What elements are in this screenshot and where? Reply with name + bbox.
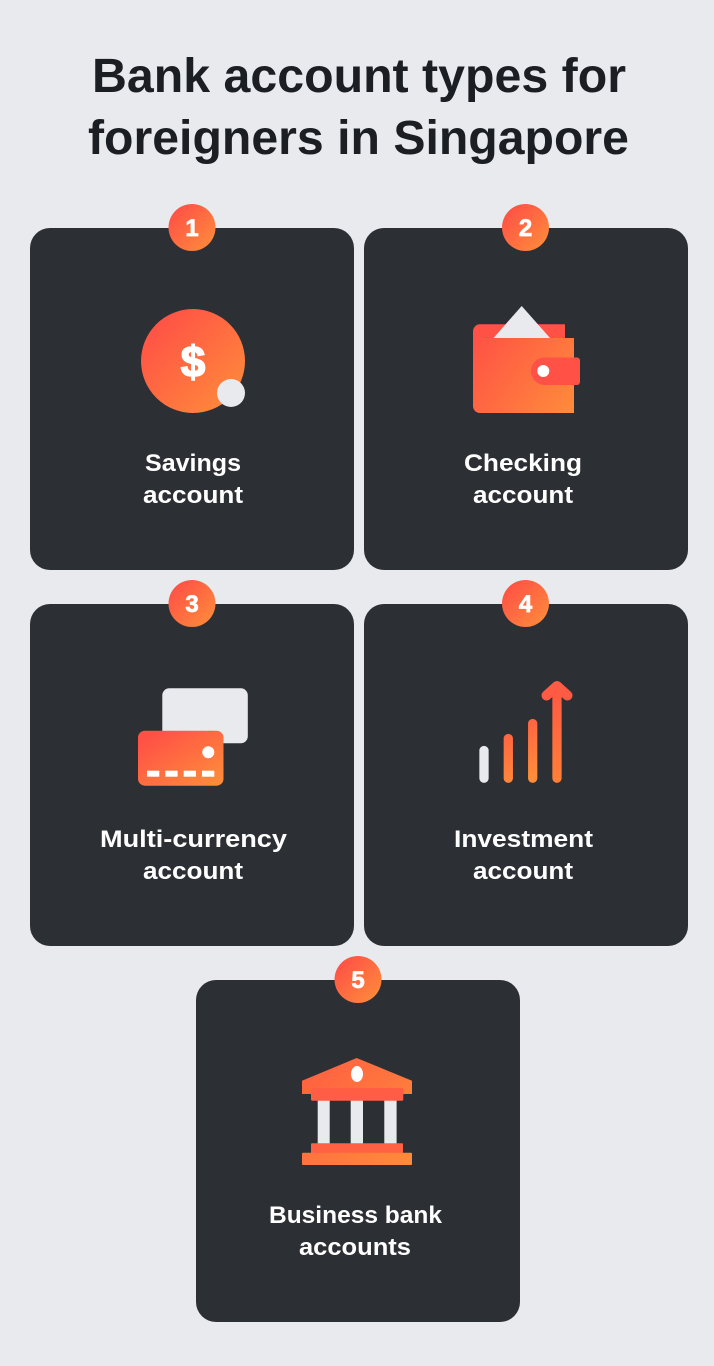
label: business bank accounts: Business bank bbox=[269, 1202, 443, 1229]
badge 5 bbox=[334, 956, 382, 1003]
label: multi-currency account bbox=[100, 826, 288, 885]
label: savings account: Savings bbox=[145, 450, 241, 477]
panel: savings account bbox=[30, 204, 354, 570]
label: savings account: account bbox=[143, 482, 243, 509]
badge 2 bbox=[502, 204, 549, 251]
label: savings account bbox=[143, 450, 243, 509]
badge 5: 5 bbox=[351, 967, 365, 994]
badge 2: 2 bbox=[519, 215, 532, 242]
label: investment account bbox=[454, 826, 593, 885]
label: investment account: Investment bbox=[454, 826, 593, 853]
label: multi-currency account: account bbox=[143, 858, 243, 885]
badge 1: 1 bbox=[185, 215, 199, 242]
title bbox=[88, 50, 629, 165]
icon: cards bbox=[138, 688, 248, 786]
badge 3 bbox=[168, 580, 216, 627]
badge 1 bbox=[168, 204, 216, 251]
label: checking account: Checking bbox=[464, 450, 582, 477]
badge 4 bbox=[502, 580, 549, 627]
label: checking account bbox=[464, 450, 582, 509]
title: Bank account types for bbox=[92, 50, 626, 103]
label: multi-currency account: Multi-currency bbox=[100, 826, 288, 853]
panel: business bank accounts bbox=[196, 956, 520, 1322]
icon: dollar coin: $ bbox=[181, 338, 205, 387]
icon: bank building bbox=[302, 1058, 412, 1165]
panel: investment account bbox=[364, 580, 688, 946]
label: business bank accounts bbox=[269, 1202, 443, 1261]
label: business bank accounts: accounts bbox=[299, 1234, 411, 1261]
icon: dollar coin bbox=[141, 309, 245, 413]
icon: rising bars with arrow bbox=[484, 686, 568, 778]
panel: multi-currency account bbox=[30, 580, 354, 946]
panel: checking account bbox=[364, 204, 688, 570]
icon: wallet bbox=[473, 306, 580, 413]
badge 4: 4 bbox=[519, 591, 533, 618]
label: checking account: account bbox=[473, 482, 573, 509]
label: investment account: account bbox=[473, 858, 573, 885]
badge 3: 3 bbox=[185, 591, 199, 618]
title: foreigners in Singapore bbox=[88, 112, 629, 165]
